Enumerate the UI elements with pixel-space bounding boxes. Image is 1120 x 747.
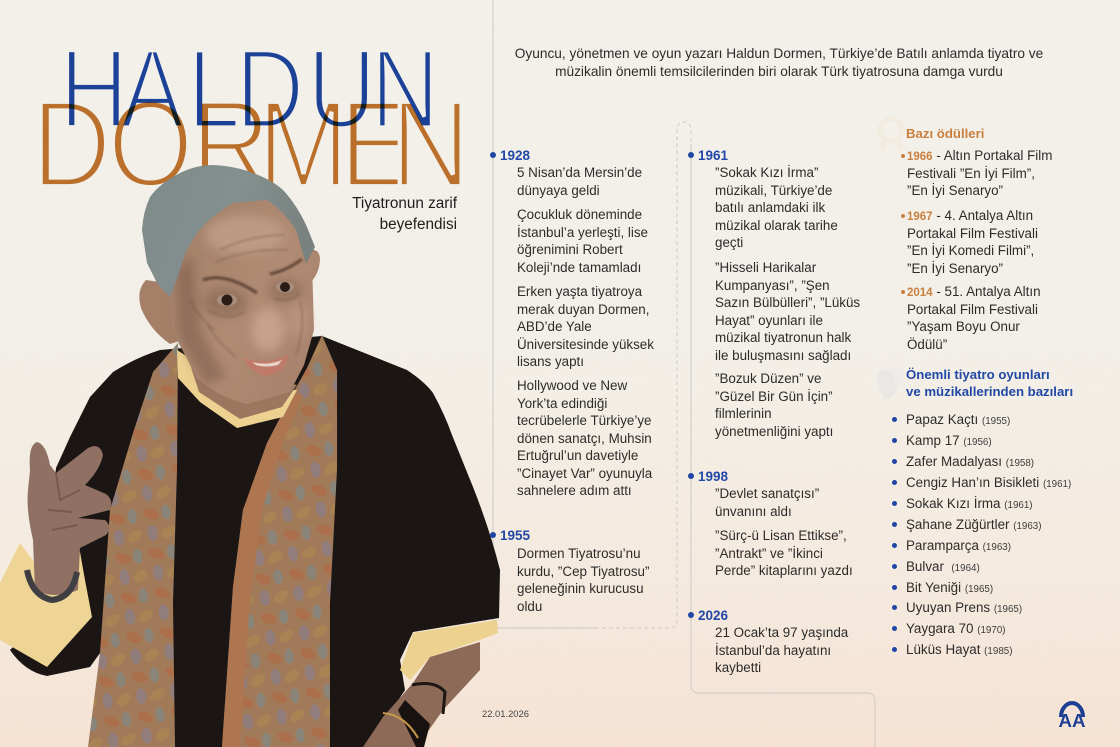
1961 second text: Hayat” oyunları ile — [715, 312, 823, 328]
scarf right strip — [222, 335, 337, 747]
title line: HALDUN: HALDUN — [60, 27, 439, 152]
1961 third text: yönetmenliğini yaptı — [715, 424, 833, 438]
education text: Üniversitesinde yüksek — [517, 336, 654, 352]
1955 events: kurdu, ”Cep Tiyatrosu” — [517, 564, 649, 578]
plays list: Lüküs Hayat (1985) — [906, 642, 1012, 657]
date: 22.01.2026 — [482, 708, 529, 719]
subtitle — [352, 195, 458, 232]
awards heading: Bazı ödülleri — [906, 126, 984, 141]
1998 second text: ”Antrakt” ve ”İkinci — [715, 546, 823, 560]
1961 second text: Kumpanyası”, ”Şen — [715, 278, 830, 292]
Hollywood text — [517, 378, 652, 498]
1961 first text: ”Sokak Kızı İrma” — [715, 165, 818, 180]
right ear — [308, 250, 320, 282]
plays list: Paramparça (1963) — [906, 538, 1011, 553]
eyebrows and wrinkles — [190, 235, 302, 357]
1928 events: dünyaya geldi — [517, 182, 600, 198]
Hollywood text: ”Cinayet Var” oyunuyla — [517, 466, 652, 480]
Hollywood text: Ertuğrul’un davetiyle — [517, 448, 638, 463]
right forearm and hand — [363, 642, 480, 747]
1998 first text: ”Devlet sanatçısı” — [715, 486, 819, 501]
scarf orange edge — [222, 393, 303, 747]
1961 third text — [715, 371, 833, 439]
award 1966: ”En İyi Senaryo” — [907, 183, 1003, 198]
1961 first text: batılı anlamdaki ilk — [715, 200, 825, 215]
award 1967 — [901, 208, 1038, 276]
plays list: Bit Yeniği (1965) — [906, 580, 993, 595]
1961 marker — [688, 152, 694, 158]
award 2014 — [901, 284, 1041, 352]
right shirt cuff — [400, 620, 498, 680]
year 1928: 1928 — [500, 148, 530, 163]
title: HALDUN DORMEN — [32, 27, 471, 200]
childhood text: İstanbul’a yerleşti, lise — [517, 224, 648, 240]
Hollywood text: Hollywood ve New — [517, 378, 627, 393]
Hollywood text: sahnelere adım attı — [517, 483, 632, 498]
raised left hand — [28, 442, 111, 595]
AA logo — [1058, 701, 1086, 730]
plays heading: Önemli tiyatro oyunları — [906, 367, 1050, 382]
2026 text: İstanbul’da hayatını — [715, 642, 831, 658]
year 1955: 1955 — [500, 528, 530, 543]
timeline column 1 — [490, 148, 654, 614]
1961 third text: ”Güzel Bir Gün İçin” — [715, 388, 833, 404]
award 1967: ”En İyi Komedi Filmi”, — [907, 243, 1034, 258]
Hollywood text: York’ta edindiği — [517, 396, 607, 410]
title line: DORMEN — [0, 0, 480, 200]
1955 events: geleneğinin kurucusu — [517, 581, 644, 596]
plays heading — [906, 367, 1073, 398]
1961 second text: müzikal tiyatronun halk — [715, 330, 851, 345]
plays list: Uyuyan Prens (1965) — [906, 600, 1022, 615]
right eye — [276, 282, 294, 292]
plays list: Yaygara 70 (1970) — [906, 621, 1006, 636]
award 2014: Ödülü” — [907, 336, 947, 352]
year 2026: 2026 — [698, 608, 728, 623]
award 2014: Portakal Film Festivali — [907, 302, 1038, 316]
1928 events — [517, 165, 642, 198]
year 1961: 1961 — [698, 148, 728, 163]
education text — [517, 284, 654, 369]
childhood text: Koleji’nde tamamladı — [517, 260, 641, 274]
plays list: Cengiz Han’ın Bisikleti (1961) — [906, 475, 1071, 490]
1961 second text — [715, 260, 860, 363]
education text: merak duyan Dormen, — [517, 302, 649, 316]
left ear — [139, 280, 182, 344]
1961 first text: müzikal olarak tarihe — [715, 218, 838, 232]
faint theatre mask icon — [877, 370, 898, 399]
award 2014: ”Yaşam Boyu Onur — [907, 319, 1020, 334]
1928 events: 5 Nisan’da Mersin’de — [517, 165, 642, 180]
portrait of Haldun Dormen — [0, 165, 500, 747]
left eye — [217, 294, 237, 306]
timeline column 2 — [688, 148, 860, 675]
shirt collar — [177, 350, 297, 428]
1961 second text: ile buluşmasını sağladı — [715, 348, 851, 362]
plays list: Zafer Madalyası (1958) — [906, 454, 1034, 469]
1961 first text: geçti — [715, 235, 743, 250]
Hollywood text: dönen sanatçı, Muhsin — [517, 430, 652, 446]
plays heading: ve müzikallerinden bazıları — [906, 384, 1073, 398]
face soft shading — [176, 215, 309, 385]
1961 second text: ”Hisseli Harikalar — [715, 260, 816, 275]
mouth — [243, 355, 288, 376]
2026 text — [715, 625, 848, 675]
childhood text: Çocukluk döneminde — [517, 207, 642, 222]
intro text: Oyuncu, yönetmen ve oyun yazarı Haldun Dormen, Türkiye’de Batılı anlamda tiyatro ve — [515, 46, 1043, 61]
title line: HALDUN — [0, 0, 480, 200]
plays list: Şahane Züğürtler (1963) — [906, 517, 1042, 532]
1998 second text: Perde” kitaplarını yazdı — [715, 563, 853, 578]
hair — [142, 165, 315, 297]
award 1966: 1966 - Altın Portakal Film — [907, 148, 1052, 163]
plays list: Bulvar (1964) — [906, 559, 980, 574]
1998 second text: ”Sürç-ü Lisan Ettikse”, — [715, 528, 847, 543]
award 1967: Portakal Film Festivali — [907, 226, 1038, 240]
plays list: Papaz Kaçtı (1955) — [906, 412, 1010, 427]
1961 third text: filmlerinin — [715, 406, 772, 421]
education text: lisans yaptı — [517, 354, 584, 369]
1928 marker — [490, 152, 496, 158]
award 1967: 1967 - 4. Antalya Altın — [907, 208, 1033, 223]
1998 second text — [715, 528, 853, 578]
1961 first text — [715, 164, 838, 250]
1955 marker — [490, 532, 496, 538]
1961 second text: Sazın Bülbülleri”, ”Lüküs — [715, 295, 860, 310]
education text: ABD’de Yale — [517, 319, 592, 334]
sweater — [10, 336, 500, 747]
award 1966 — [901, 148, 1052, 198]
2026 text: kaybetti — [715, 660, 761, 675]
1998 marker — [688, 473, 694, 479]
1955 events — [517, 546, 649, 614]
2026 text: 21 Ocak’ta 97 yaşında — [715, 625, 848, 640]
left cuff — [0, 543, 92, 667]
1955 events: Dormen Tiyatrosu’nu — [517, 546, 641, 561]
1961 third text: ”Bozuk Düzen” ve — [715, 371, 821, 386]
award 2014: 2014 - 51. Antalya Altın — [907, 284, 1041, 299]
plays list: Sokak Kızı İrma (1961) — [906, 496, 1033, 511]
1961 first text: müzikali, Türkiye’de — [715, 182, 832, 198]
faint award icon — [878, 116, 904, 150]
education text: Erken yaşta tiyatroya — [517, 284, 642, 299]
intro text — [515, 46, 1043, 79]
subtitle: Tiyatronun zarif — [352, 195, 457, 212]
intro text: müzikalin önemli temsilcilerinden biri olarak Türk tiyatrosuna damga vurdu — [555, 64, 1003, 79]
Hollywood text: tecrübelerle Türkiye’ye — [517, 413, 651, 428]
subtitle: beyefendisi — [380, 216, 457, 232]
wrist jewellery — [383, 684, 445, 747]
plays list: Kamp 17 (1956) — [906, 433, 992, 448]
1998 first text — [715, 486, 819, 518]
childhood text: öğrenimini Robert — [517, 242, 623, 257]
year 1998: 1998 — [698, 469, 728, 484]
2026 marker — [688, 612, 694, 618]
award 1967: ”En İyi Senaryo” — [907, 260, 1003, 276]
face — [170, 195, 314, 404]
1955 events: oldu — [517, 598, 542, 614]
scarf left strip — [88, 343, 178, 747]
childhood text — [517, 207, 648, 275]
hand knuckle shading — [48, 473, 80, 530]
1998 first text: ünvanını aldı — [715, 504, 792, 518]
award 1966: Festivali ”En İyi Film”, — [907, 166, 1035, 180]
neck — [184, 345, 297, 419]
left bracelet — [27, 570, 77, 600]
